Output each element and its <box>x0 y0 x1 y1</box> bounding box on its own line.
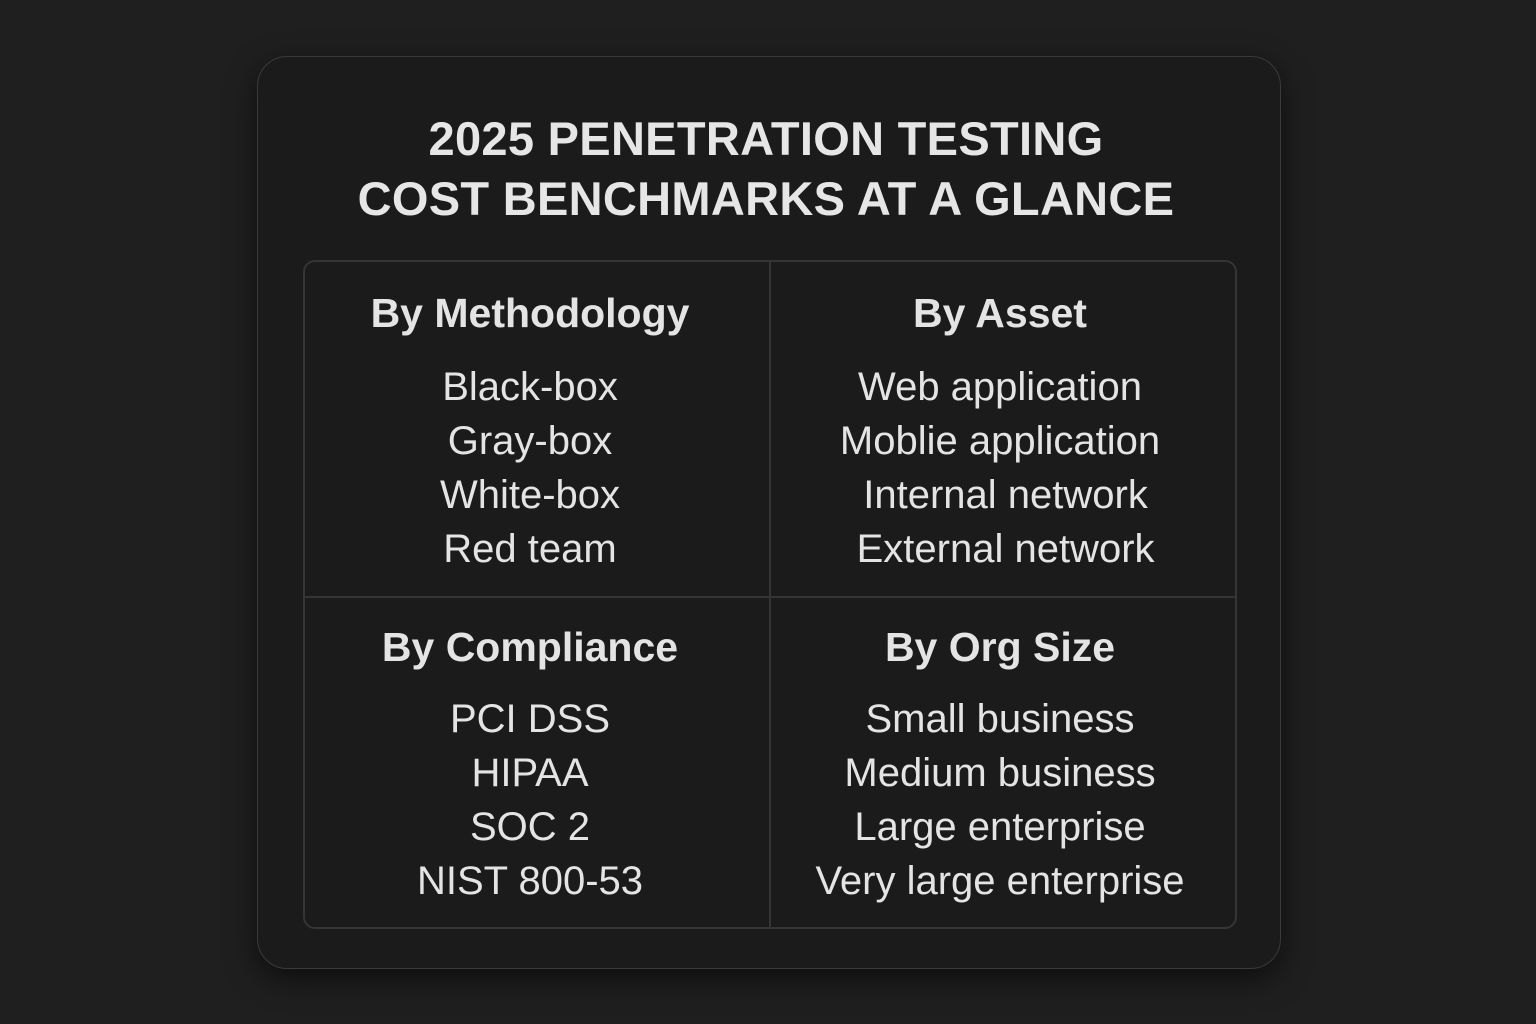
panel: by asset: Web application <box>858 365 1142 409</box>
panel: by methodology: White-box <box>440 473 620 517</box>
panel: by asset: Internal network <box>863 473 1148 517</box>
grid table <box>303 260 1237 929</box>
panel: by org size: Large enterprise <box>854 805 1146 849</box>
panel: by methodology: By Methodology <box>371 290 689 336</box>
panel: by asset: By Asset <box>913 290 1087 336</box>
panel: by asset: Moblie application <box>840 419 1160 463</box>
panel: by org size: By Org Size <box>885 624 1115 670</box>
panel: by asset <box>840 290 1160 571</box>
panel: by org size: Very large enterprise <box>815 859 1185 903</box>
panel: by compliance: NIST 800-53 <box>417 859 643 903</box>
panel: by methodology: Black-box <box>442 365 618 409</box>
panel: by methodology: Red team <box>443 527 617 571</box>
title: 2025 PENETRATION TESTING <box>429 112 1103 165</box>
panel: by org size: Medium business <box>844 751 1156 795</box>
panel: by org size: Small business <box>865 697 1134 741</box>
panel: by compliance: HIPAA <box>471 751 589 795</box>
panel: by compliance <box>382 624 678 903</box>
panel: by compliance: By Compliance <box>382 624 678 670</box>
card <box>257 56 1281 969</box>
title <box>358 112 1174 225</box>
title: COST BENCHMARKS AT A GLANCE <box>358 172 1174 225</box>
panel: by methodology: Gray-box <box>448 419 612 463</box>
panel: by compliance: SOC 2 <box>470 805 590 849</box>
panel: by methodology <box>371 290 690 571</box>
panel: by compliance: PCI DSS <box>450 697 610 741</box>
panel: by org size <box>815 624 1185 903</box>
panel: by asset: External network <box>857 527 1155 571</box>
